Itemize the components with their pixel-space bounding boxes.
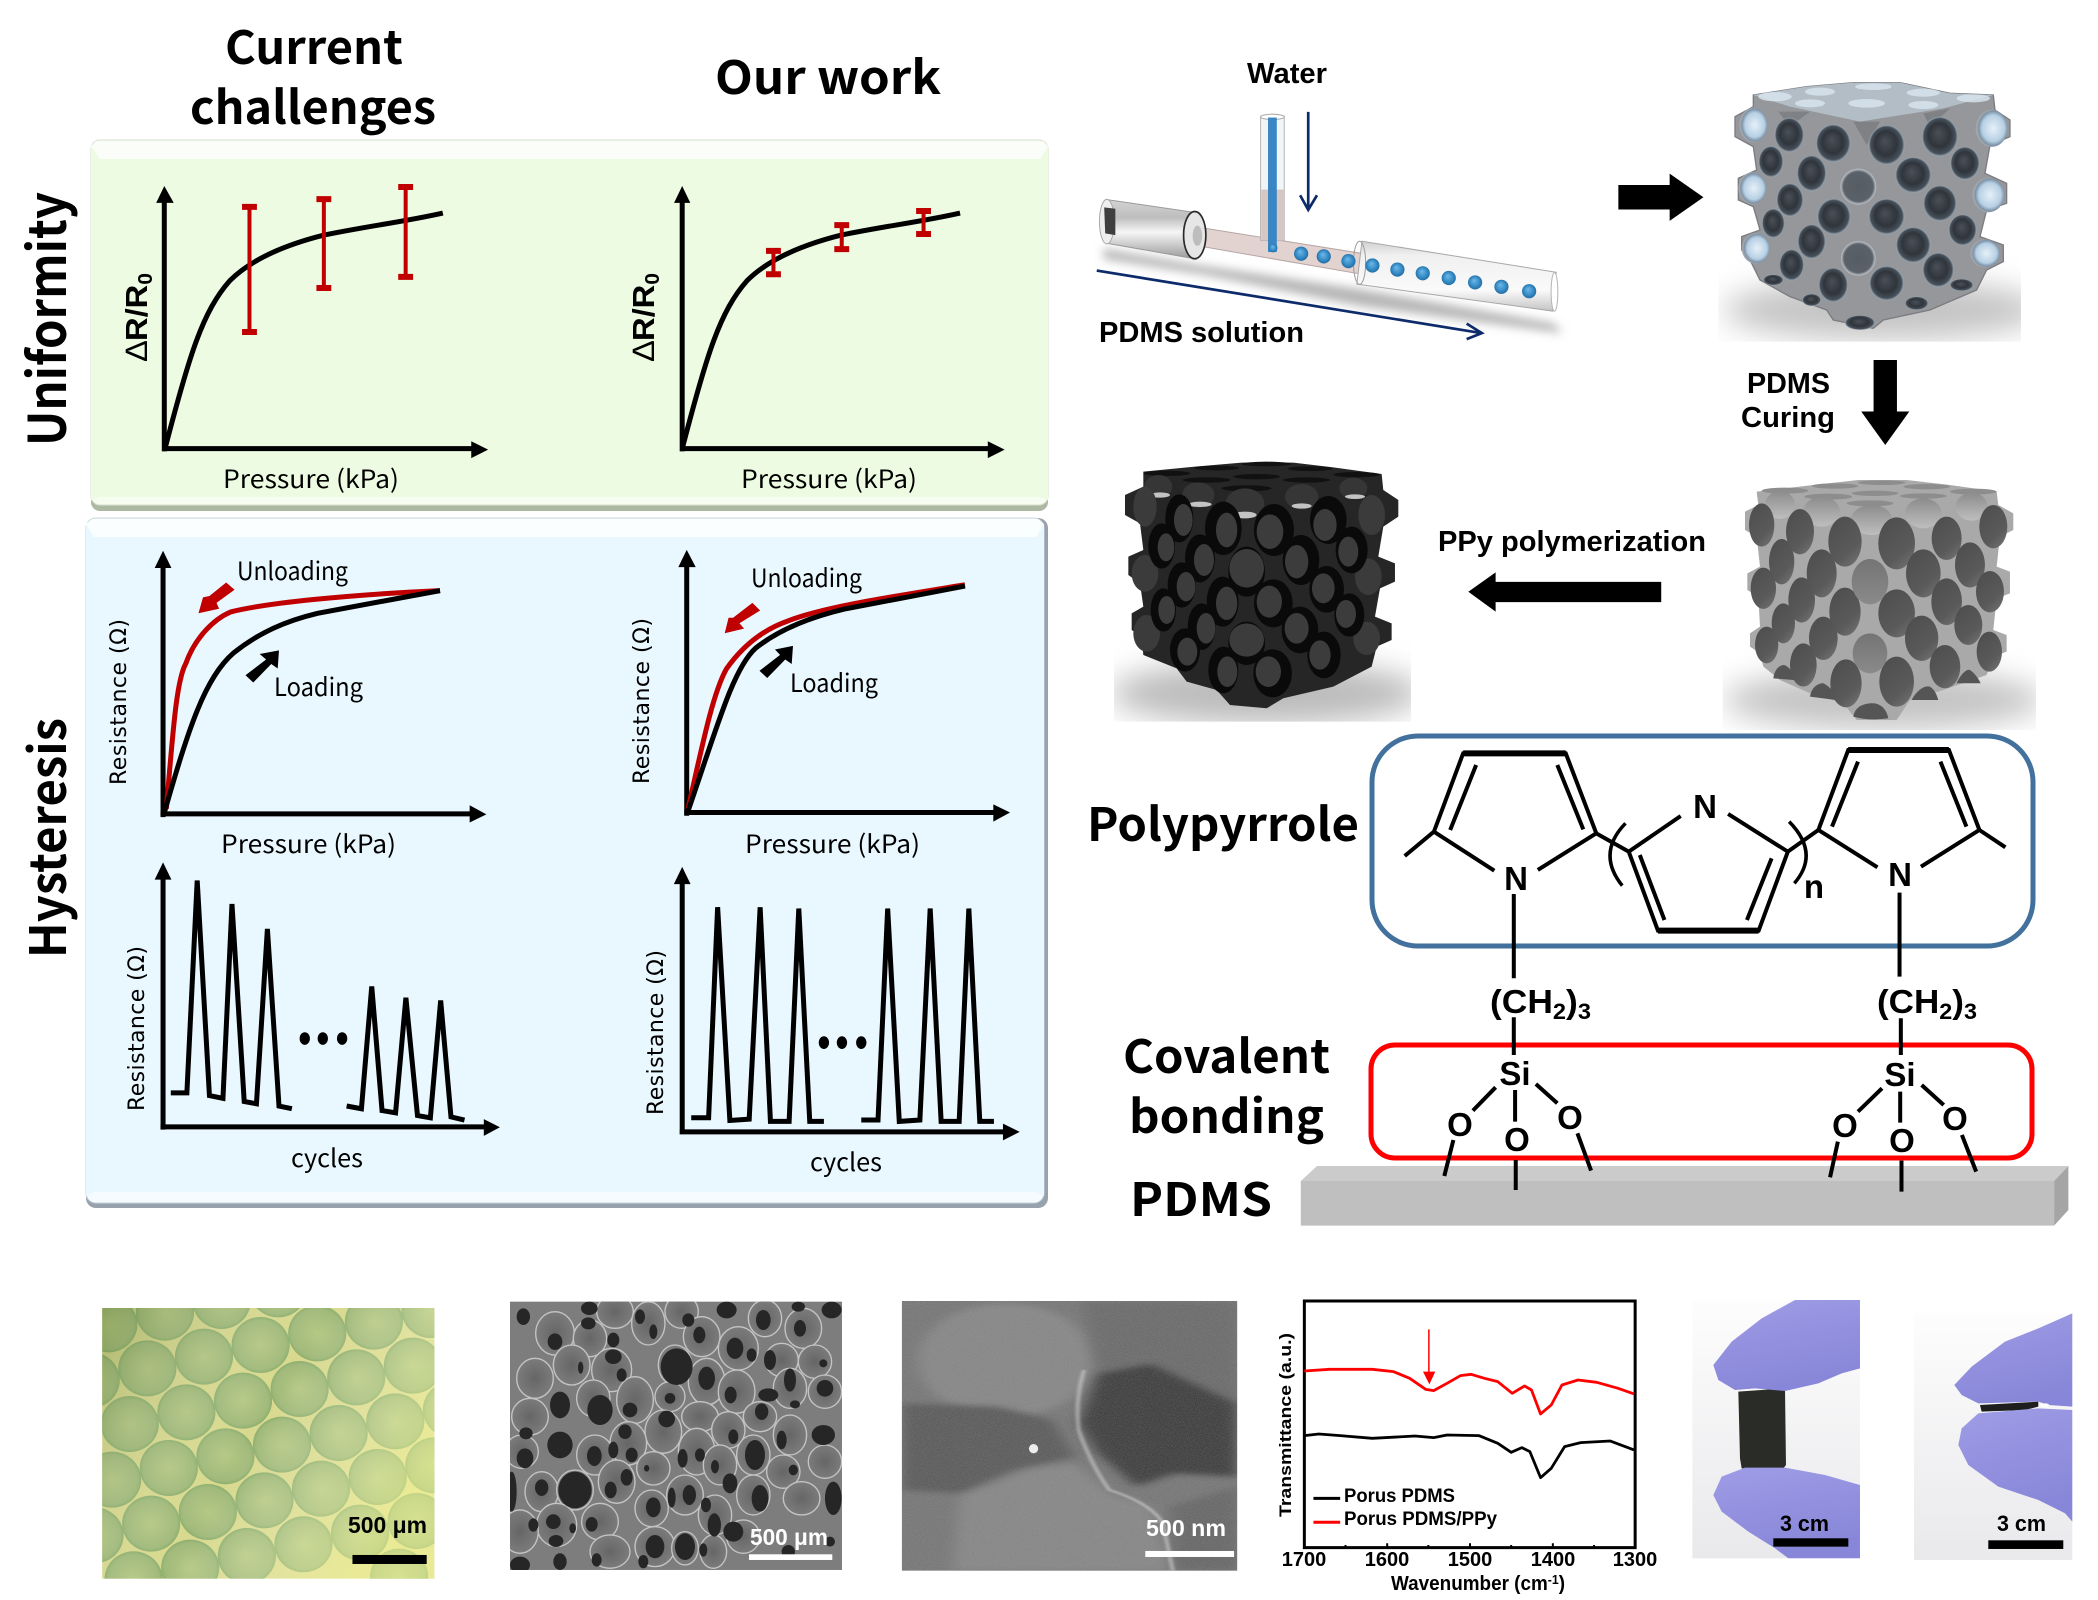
title: Current challenges: [190, 12, 436, 138]
scale label: 500 nm: 500 nm: [1146, 1515, 1226, 1541]
axis ticks: wavenumber: 1600: [1365, 1549, 1409, 1571]
axis ticks: wavenumber: [1282, 1549, 1657, 1571]
arrow: down: [1861, 360, 1909, 445]
label: loading: Loading: [790, 664, 878, 700]
title: Our work: Our work: [715, 42, 941, 108]
image: green droplets micrograph: [102, 1308, 434, 1579]
label: PDMS curing: Curing: [1741, 402, 1835, 434]
label: linker right: 3: [1964, 999, 1977, 1024]
axis label: delta R over R0: ∆R/R: [119, 288, 154, 361]
axis label: cycles: cycles: [291, 1139, 363, 1175]
axis label: resistance: Resistance (Ω): [125, 946, 150, 1111]
panel: uniformity: [91, 140, 1048, 511]
axis ticks: wavenumber: 1700: [1282, 1549, 1326, 1571]
photo: sensor held compressed: [1914, 1313, 2072, 1560]
label: linker right: 2: [1939, 999, 1952, 1024]
axis label: pressure: Pressure (kPa): [741, 460, 917, 496]
label: PPy polymerization: PPy polymerization: [1438, 526, 1706, 558]
chart: uniformity our work: [626, 186, 1005, 496]
atom labels: nitrogen: N: [1504, 860, 1528, 897]
image: porous PDMS/PPy SEM high magnification: [902, 1301, 1237, 1571]
scale label: 3 cm: 3 cm: [1780, 1511, 1829, 1536]
chart: uniformity current challenges: [119, 186, 488, 496]
heading: PDMS: PDMS: [1130, 1164, 1272, 1230]
label: water: Water: [1247, 58, 1327, 90]
panel: hysteresis: [86, 518, 1048, 1208]
title: Current challenges: Current: [225, 12, 403, 78]
label: loading: Loading: [274, 668, 363, 704]
diagram: microfluidic droplet generator: [1097, 58, 1563, 349]
label: linker left: (CH: [1490, 983, 1549, 1020]
atom labels: silicon and oxygen: O: [1889, 1122, 1915, 1159]
substrate: PDMS slab: [1301, 1166, 2068, 1226]
legend: porous PDMS: Porus PDMS: [1344, 1486, 1455, 1507]
box: covalent bonding group: [1371, 1045, 2032, 1158]
scale label: 500 um on SEM: 500 μm: [750, 1524, 828, 1550]
axis label: cycles: cycles: [810, 1143, 882, 1179]
heading: Polypyrrole: Polypyrrole: [1087, 789, 1359, 855]
label: PDMS curing: [1741, 368, 1835, 434]
atom labels: silicon and oxygen: [1447, 1055, 1968, 1159]
atom labels: silicon and oxygen: O: [1832, 1107, 1858, 1144]
label: polymer repeat n: n: [1804, 868, 1824, 905]
image: porous grey PDMS cube: [1723, 480, 2043, 730]
arrow: left: [1468, 572, 1661, 612]
atom labels: silicon and oxygen: Si: [1499, 1055, 1531, 1092]
axis label: resistance: Resistance (Ω): [107, 619, 132, 785]
row heading: Uniformity: Uniformity: [6, 192, 81, 446]
atom labels: nitrogen: N: [1888, 856, 1912, 893]
axis label: pressure: Pressure (kPa): [223, 460, 399, 496]
axis label: pressure: Pressure (kPa): [221, 825, 396, 861]
chart: FTIR transmittance spectra: [1276, 1301, 1657, 1595]
heading: Covalent bonding: [1123, 1021, 1330, 1147]
chart: hysteresis our work loading curves: [630, 550, 1010, 861]
arrow: right: [1618, 174, 1703, 221]
chart: hysteresis current challenges loading curves: [107, 551, 486, 861]
image: porous PDMS SEM low magnification: [502, 1295, 842, 1573]
title: Current challenges: challenges: [190, 72, 436, 138]
atom labels: silicon and oxygen: O: [1557, 1099, 1583, 1136]
scale label: 500 um on droplets: 500 μm: [348, 1512, 427, 1538]
atom labels: nitrogen: N: [1693, 788, 1717, 825]
axis label: resistance: Resistance (Ω): [644, 950, 669, 1115]
label: PDMS curing: PDMS: [1747, 368, 1830, 400]
axis label: delta R over R0: ∆R/R: [626, 288, 661, 361]
heading: Covalent bonding: bonding: [1129, 1081, 1324, 1147]
image: black PPy coated cube: [1110, 462, 1423, 725]
box: polypyrrole group: [1372, 736, 2033, 946]
molecule: polypyrrole and silane linkers: [1405, 750, 2005, 1192]
axis label: delta R over R0: 0: [135, 273, 157, 285]
axis label: delta R over R0: 0: [642, 273, 664, 285]
axis ticks: wavenumber: 1300: [1613, 1549, 1657, 1571]
axis ticks: wavenumber: 1400: [1531, 1549, 1575, 1571]
label: linker left: ): [1566, 983, 1578, 1020]
axis label: wavenumber: Wavenumber (cm: [1391, 1573, 1557, 1595]
atom labels: silicon and oxygen: Si: [1884, 1056, 1916, 1093]
label: linker left: 2: [1553, 999, 1566, 1024]
axis label: wavenumber: ): [1559, 1573, 1565, 1595]
row heading: Hysteresis: Hysteresis: [9, 718, 81, 958]
label: PDMS solution: PDMS solution: [1099, 317, 1304, 349]
atom labels: silicon and oxygen: O: [1504, 1121, 1530, 1158]
atom labels: silicon and oxygen: O: [1447, 1106, 1473, 1143]
atom labels: nitrogen: [1504, 788, 1912, 897]
axis label: transmittance: Transmittance (a.u.): [1276, 1333, 1295, 1517]
label: unloading: Unloading: [751, 559, 862, 595]
label: linker right: ): [1952, 983, 1964, 1020]
axis label: wavenumber: -1: [1548, 1572, 1559, 1587]
heading: Covalent bonding: Covalent: [1123, 1021, 1330, 1087]
axis ticks: wavenumber: 1500: [1448, 1549, 1492, 1571]
image: glass microsphere template cube: [1723, 83, 2043, 340]
label: linker left: 3: [1578, 999, 1591, 1024]
chart: hysteresis current challenges cycles: [125, 862, 500, 1175]
axis label: resistance: Resistance (Ω): [630, 618, 655, 784]
chart: hysteresis our work cycles: [644, 867, 1020, 1179]
photo: sensor held uncompressed: [1692, 1300, 1860, 1558]
scale label: 3 cm: 3 cm: [1997, 1511, 2046, 1536]
legend: porous PDMS/PPy: Porus PDMS/PPy: [1344, 1509, 1497, 1530]
atom labels: silicon and oxygen: O: [1942, 1100, 1968, 1137]
label: linker right: (CH: [1877, 983, 1936, 1020]
label: unloading: Unloading: [237, 552, 348, 588]
axis label: pressure: Pressure (kPa): [745, 825, 920, 861]
